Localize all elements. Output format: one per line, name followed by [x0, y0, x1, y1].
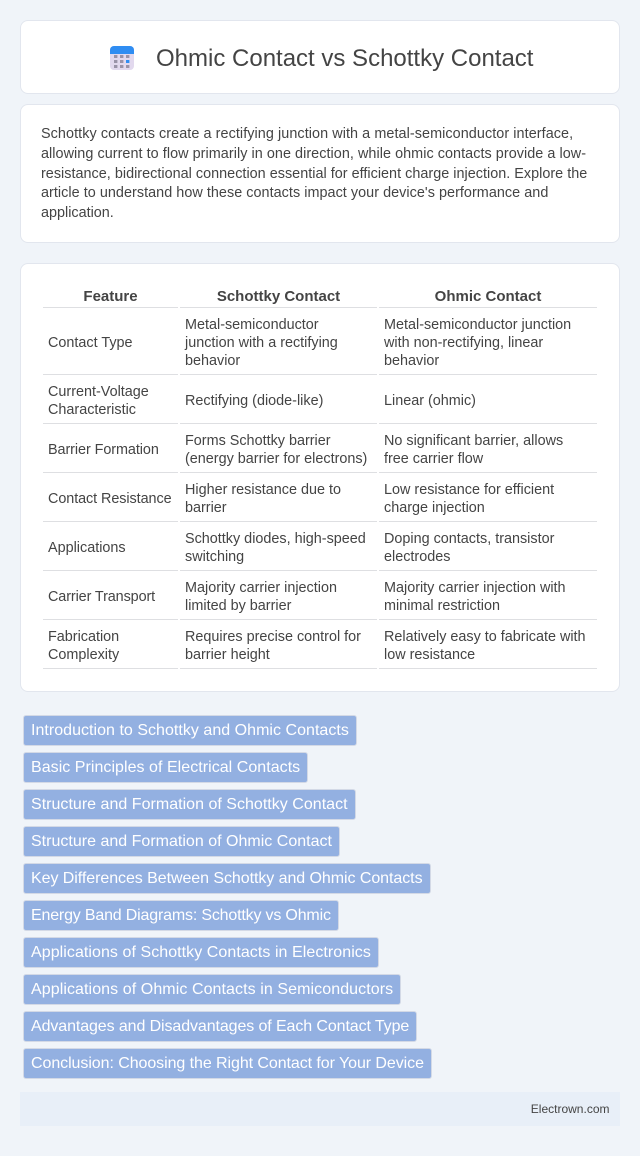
row: Fabrication Complexity: Fabrication: [48, 629, 119, 645]
cell: Schottky diodes, high-speed: [185, 531, 366, 547]
link: Conclusion: Conclusion: Choosing the Right Contact for Your Device: [31, 1055, 424, 1072]
cell: [185, 580, 337, 614]
cell: limited by barrier: [185, 598, 291, 614]
title: Ohmic Contact vs Schottky Contact: [156, 45, 533, 72]
intro text: [41, 126, 587, 221]
link: Ohmic structure: [23, 826, 340, 857]
panel: comparison table: [20, 263, 620, 692]
cell: Linear (ohmic): [384, 393, 476, 409]
link: Schottky applications: [23, 937, 379, 968]
cell: Rectifying (diode-like): [185, 393, 323, 409]
cell: barrier height: [185, 647, 270, 663]
row: Current-Voltage Characteristic: Current-Voltage: [48, 384, 149, 400]
cell: electrodes: [384, 549, 450, 565]
cell: [384, 482, 554, 516]
table header: Ohmic Contact: Ohmic Contact: [435, 288, 541, 305]
cell: Doping contacts, transistor: [384, 531, 554, 547]
intro text: application.: [41, 205, 114, 221]
icon: calendar: [110, 46, 134, 70]
link: Ohmic structure: Structure and Formation of Ohmic Contact: [31, 833, 332, 850]
cell: behavior: [384, 353, 439, 369]
cell: [384, 580, 566, 614]
cell: Metal-semiconductor: [185, 317, 319, 333]
link: Ohmic applications: [23, 974, 401, 1005]
cell: behavior: [185, 353, 240, 369]
intro panel: [20, 104, 620, 243]
link: Introduction: [23, 715, 357, 746]
cell: free carrier flow: [384, 451, 483, 467]
cell: [185, 531, 366, 565]
table header: Schottky Contact: Schottky Contact: [217, 288, 340, 305]
link: Ohmic applications: Applications of Ohmic Contacts in Semiconductors: [31, 981, 393, 998]
cell: [184, 317, 338, 369]
cell: [384, 317, 571, 369]
cell: Metal-semiconductor junction: [384, 317, 571, 333]
link: Basic Principles: Basic Principles of Electrical Contacts: [31, 759, 300, 776]
cell: Higher resistance due to: [185, 482, 341, 498]
row: Current-Voltage Characteristic: Characteristic: [48, 402, 136, 418]
link: Schottky structure: [23, 789, 356, 820]
table header: Feature: Feature: [83, 288, 138, 305]
link: Key differences: [23, 863, 431, 894]
link: Basic Principles: [23, 752, 308, 783]
cell: [185, 482, 341, 516]
cell: minimal restriction: [384, 598, 500, 614]
intro text: article to understand how these contacts impact your device's performance and: [41, 185, 548, 201]
row: Applications: Applications: [48, 540, 126, 556]
link: Energy band diagrams: Energy Band Diagrams: Schottky vs Ohmic: [31, 907, 331, 924]
cell: Requires precise control for: [185, 629, 361, 645]
row: Contact Type: Contact Type: [48, 335, 133, 351]
row: Barrier Formation: Barrier Formation: [48, 442, 159, 458]
cell: Majority carrier injection with: [384, 580, 566, 596]
cell: charge injection: [384, 500, 485, 516]
cell: junction with a rectifying: [185, 335, 338, 351]
intro text: allowing current to flow primarily in one direction, while ohmic contacts provide a low-: [41, 146, 586, 162]
cell: [384, 433, 563, 467]
cell: with non-rectifying, linear: [384, 335, 543, 351]
row: Fabrication Complexity: [48, 629, 120, 663]
header panel: [20, 20, 620, 94]
link: Schottky structure: Structure and Formation of Schottky Contact: [31, 796, 348, 813]
cell: barrier: [185, 500, 227, 516]
row: Contact Resistance: Contact Resistance: [48, 491, 172, 507]
footer bar: [20, 1092, 620, 1126]
link: Energy band diagrams: [23, 900, 339, 931]
cell: switching: [185, 549, 244, 565]
link: Introduction: Introduction to Schottky and Ohmic Contacts: [31, 722, 349, 739]
row: Current-Voltage Characteristic: [48, 384, 149, 418]
link: Schottky applications: Applications of Schottky Contacts in Electronics: [31, 944, 371, 961]
cell: Majority carrier injection: [185, 580, 337, 596]
link: Conclusion: [23, 1048, 432, 1079]
cell: low resistance: [384, 647, 475, 663]
cell: Relatively easy to fabricate with: [384, 629, 586, 645]
row: Fabrication Complexity: Complexity: [48, 647, 119, 663]
intro text: Schottky contacts create a rectifying junction with a metal-semiconductor interface,: [41, 126, 573, 142]
cell: [384, 531, 554, 565]
cell: No significant barrier, allows: [384, 433, 563, 449]
intro text: resistance, bidirectional connection essential for efficient charge injection. Explore the: [41, 166, 587, 182]
link: Advantages: [23, 1011, 417, 1042]
link: Key differences: Key Differences Between Schottky and Ohmic Contacts: [31, 870, 423, 887]
footer source: Electrown.com: [531, 1102, 610, 1116]
cell: Forms Schottky barrier: [185, 433, 331, 449]
cell: [185, 629, 361, 663]
link: Advantages: Advantages and Disadvantages of Each Contact Type: [31, 1018, 409, 1035]
cell: [185, 433, 367, 467]
cell: (energy barrier for electrons): [185, 451, 367, 467]
cell: Low resistance for efficient: [384, 482, 554, 498]
row: Carrier Transport: Carrier Transport: [48, 589, 155, 605]
cell: [384, 629, 586, 663]
